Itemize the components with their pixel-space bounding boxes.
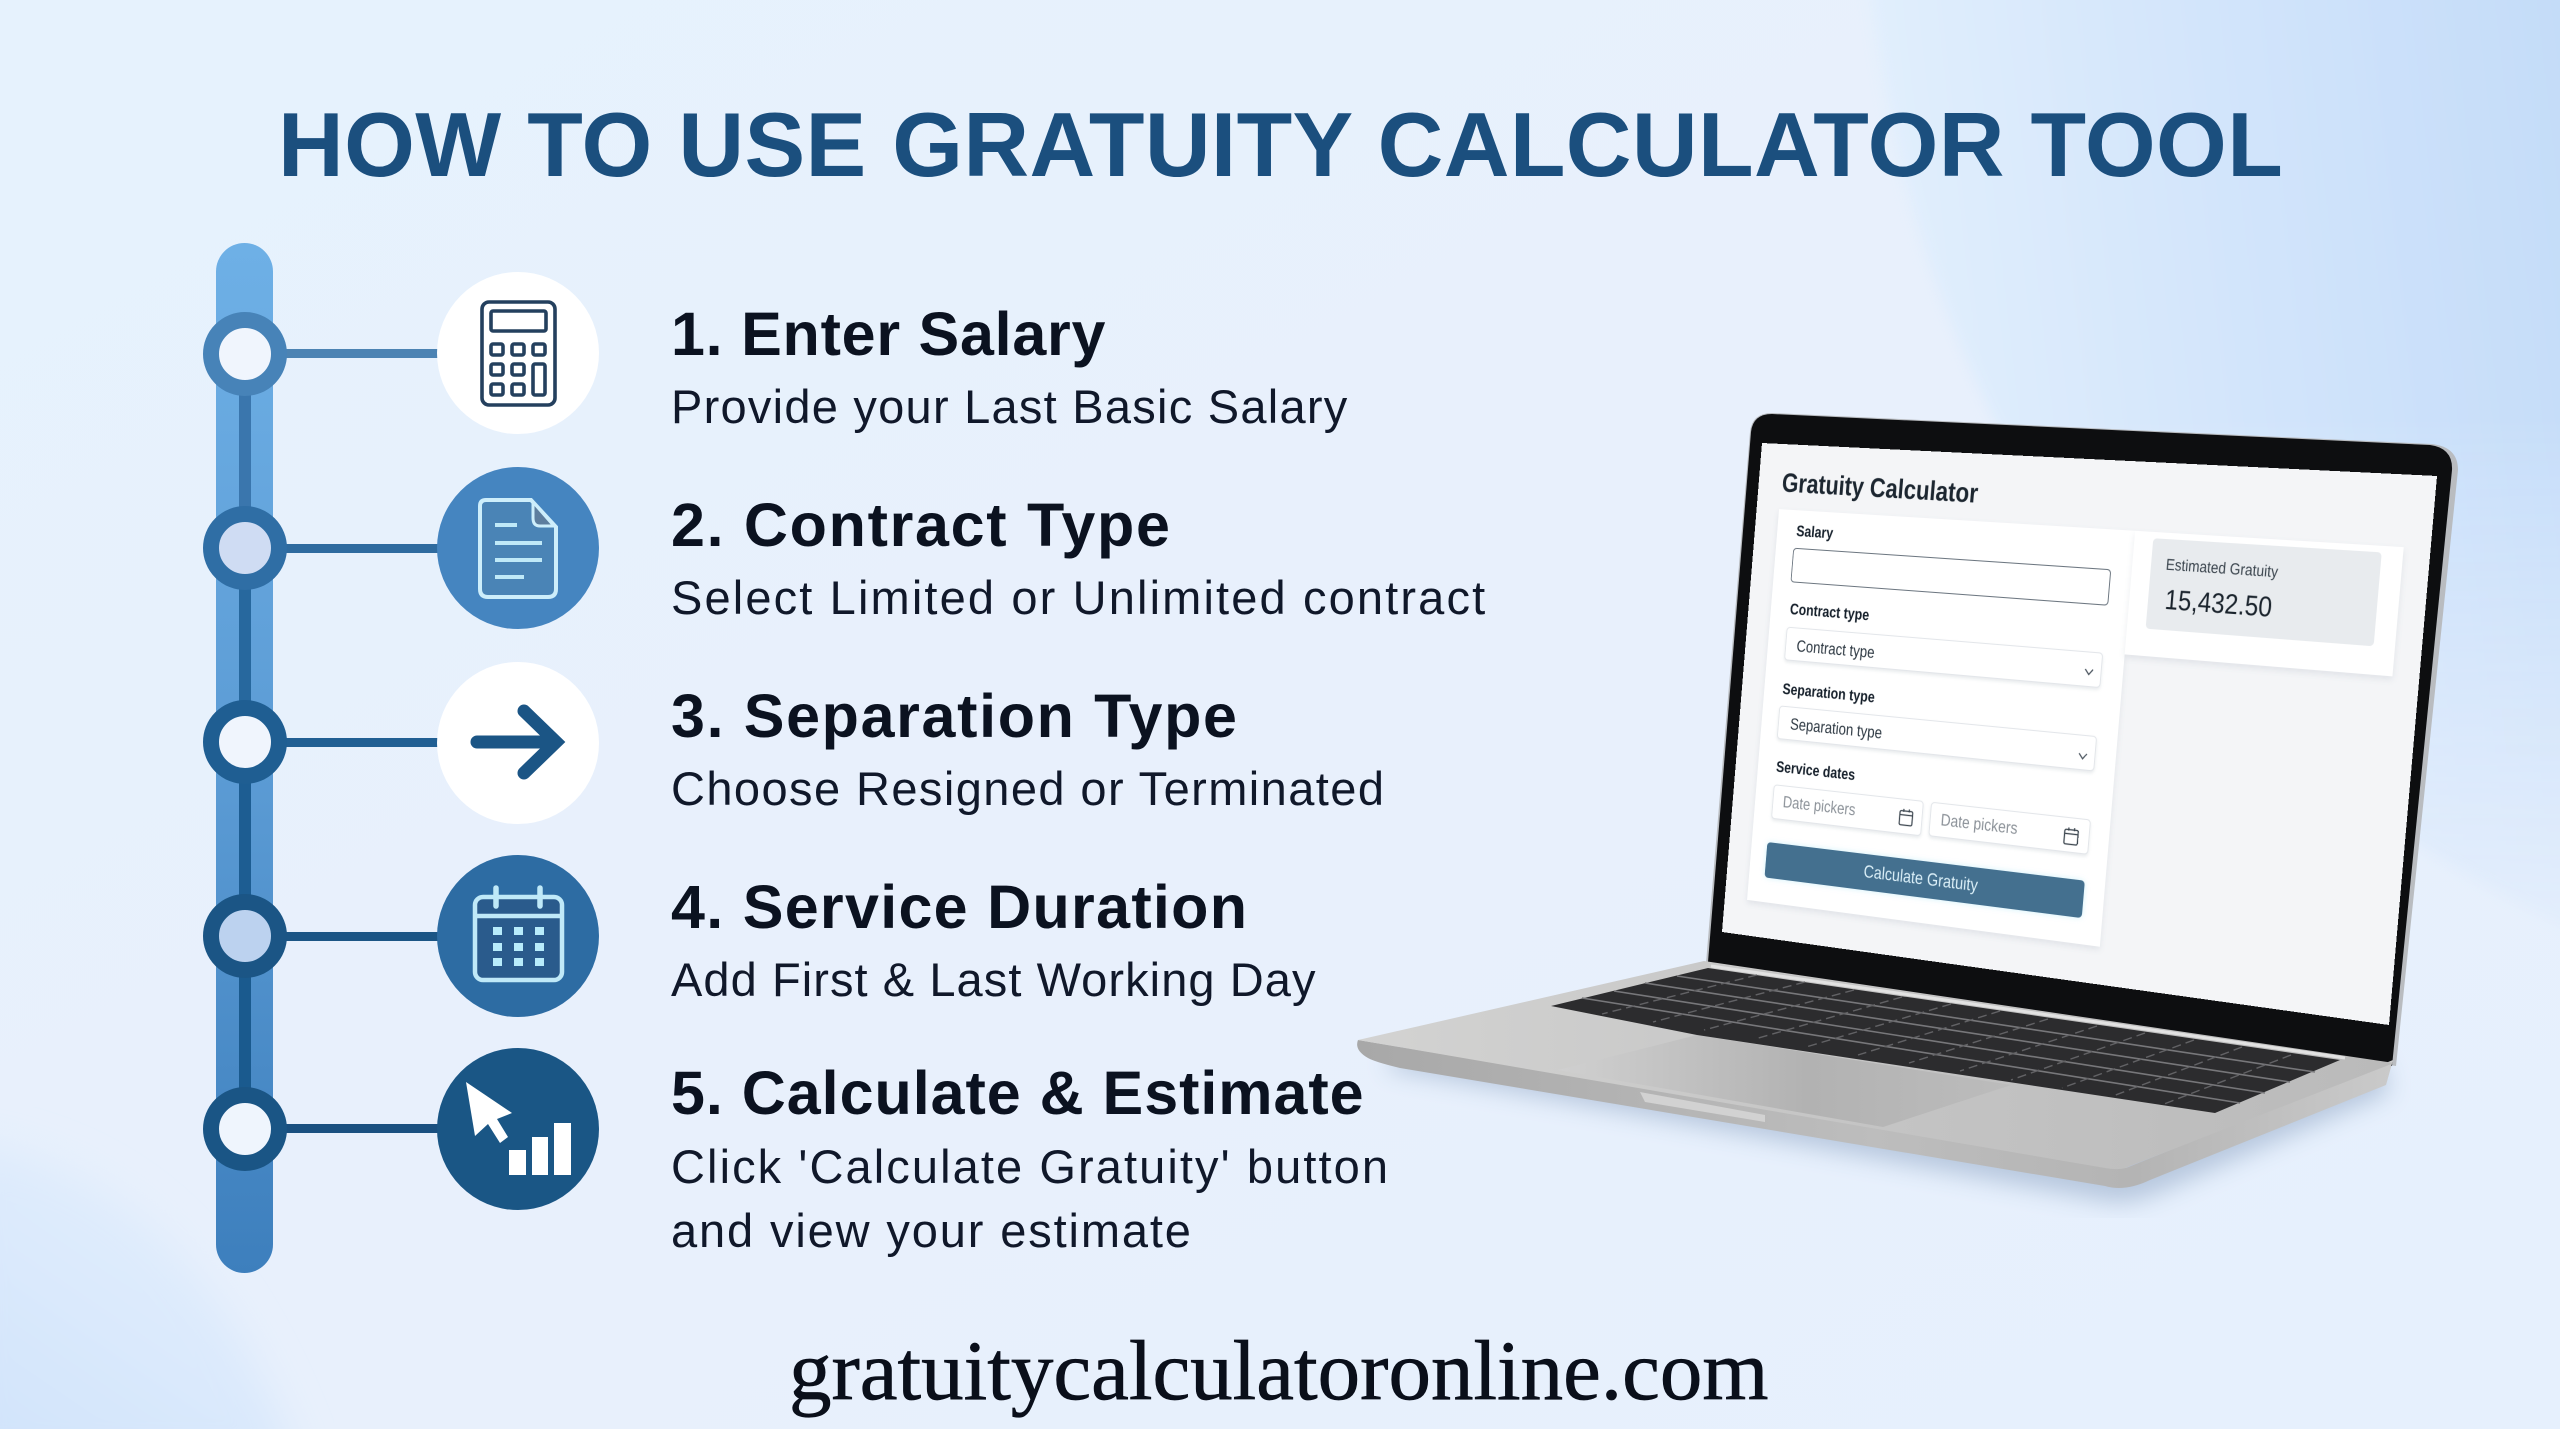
result card [2125,531,2404,676]
contract type select [1784,627,2103,688]
estimated gratuity panel [2146,538,2382,646]
screen title: Gratuity Calculator [1781,468,1979,509]
icon: cursor and bars [437,1048,599,1210]
trackpad [1558,1035,2011,1127]
laptop base [1357,961,2394,1188]
timeline rail with nodes and icon circles [203,243,599,1273]
keyboard [1551,966,2345,1113]
salary input [1790,548,2111,606]
separation type select [1777,705,2097,772]
icon: calendar [437,855,599,1017]
step 5 text: and view your estimate [671,1204,1193,1257]
icon: document [437,467,599,629]
laptop screen: gratuity calculator form [1722,443,2437,1025]
step 4 node and connector [211,902,440,970]
step 2 text: 2. Contract Type [671,491,1172,559]
step 5 text: Click 'Calculate Gratuity' button [671,1140,1390,1193]
date picker one: Date pickers [1782,793,1856,819]
calculate button [1765,842,2085,918]
step 1 node and connector [211,320,440,388]
step 5 text [671,1059,1390,1257]
date picker one [1771,784,1924,836]
step 1 text: 1. Enter Salary [671,300,1106,368]
step 3 node and connector [211,708,440,776]
step 3 text [671,682,1385,815]
form card [1747,509,2135,947]
service dates label: Service dates [1775,759,1856,784]
contract type label: Contract type [1789,601,1870,624]
step 3 text: Choose Resigned or Terminated [671,762,1385,815]
step 2 node and connector [211,514,440,582]
date picker two [1928,802,2091,855]
salary label: Salary [1796,523,1834,542]
step 4 text: Add First & Last Working Day [671,953,1317,1006]
vertical rail [216,243,273,1273]
step 2 text: Select Limited or Unlimited contract [671,571,1487,624]
step 5 text: 5. Calculate & Estimate [671,1059,1365,1127]
step 4 text: 4. Service Duration [671,873,1248,941]
estimated gratuity panel: Estimated Gratuity [2165,556,2279,582]
separation type label: Separation type [1782,681,1875,706]
title: HOW TO USE GRATUITY CALCULATOR TOOL [278,95,2283,196]
step 1 text: Provide your Last Basic Salary [671,380,1349,433]
separation type select: Separation type [1789,715,1883,743]
step 1 text [671,300,1349,433]
icon: calculator [437,272,599,434]
icon: arrow [437,662,599,824]
step 5 node and connector [211,1095,440,1163]
date picker two: Date pickers [1940,811,2018,838]
step 2 text [671,491,1487,624]
footer website: gratuitycalculatoronline.com [789,1324,1768,1418]
laptop lid [1706,413,2458,1066]
step 3 text: 3. Separation Type [671,682,1239,750]
step 4 text [671,873,1317,1006]
estimated gratuity panel: 15,432.50 [2164,584,2273,623]
calculate button: Calculate Gratuity [1863,861,1979,895]
laptop shadow [1385,1050,2390,1203]
contract type select: Contract type [1796,637,1875,662]
